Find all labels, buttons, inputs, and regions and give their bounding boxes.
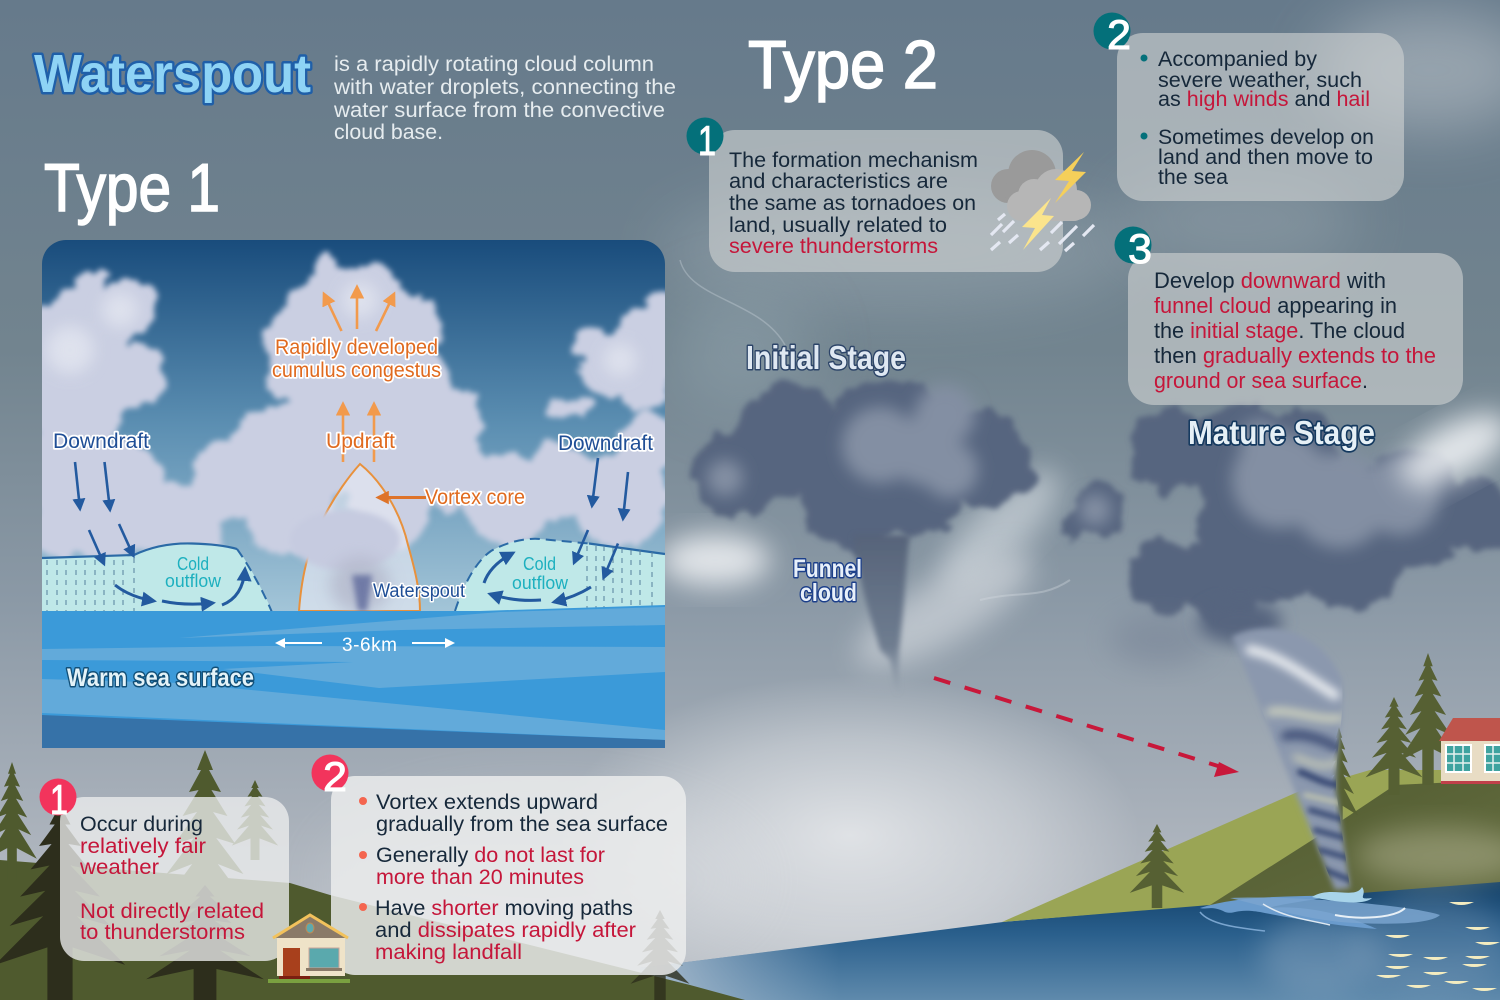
note text: land, usually related to [729,214,947,237]
panel: type 1 diagram [20,240,688,748]
background mist and wisps [320,10,1500,995]
badge 1 [686,117,724,164]
note text: the same as tornadoes on [729,192,976,215]
note text: severe weather, such [1158,69,1362,92]
note text: gradually from the sea surface [376,813,668,836]
icon: thunderstorm [991,150,1094,251]
arrow: width span [277,642,453,644]
label: cold outflow right: Cold [523,554,556,574]
water swirl [1200,887,1440,931]
panel: type 2 note 3 [1114,225,1463,405]
note text [1154,268,1436,393]
arrows: outflow circulation [115,553,591,605]
label: funnel cloud: cloud [800,579,857,607]
panel: type 1 note 1 [40,776,289,961]
cold outflow right [455,539,665,611]
note text: and characteristics are [729,170,948,193]
label: cold outflow left [166,556,221,587]
note text: relatively fair [80,835,206,858]
label: vortex core: Vortex core [425,486,525,509]
note text: Accompanied by [1158,48,1318,71]
label: downdraft right: Downdraft [558,432,653,455]
label: cold outflow right: outflow [512,573,569,593]
panel: lower scenery left [0,750,745,1000]
panel: type 1 note 2 [312,753,686,975]
label: rapidly developed cumulus congestus [272,336,441,382]
label: funnel cloud [793,555,862,607]
definition text [333,53,676,144]
badge 1 [40,776,76,823]
note text [375,791,668,964]
storm cloud: initial stage [693,379,1033,695]
note text: as high winds and hail [1158,88,1370,111]
note text: The formation mechanism [729,149,978,172]
badge 3: 3 [1128,225,1152,272]
note text: Develop downward with [1154,268,1386,293]
note text: weather [79,856,159,879]
note text [729,149,978,258]
panel: type 2 note 2 [1094,11,1404,201]
cold outflow left [42,543,274,617]
note text: Sometimes develop on [1158,126,1374,149]
clouds in diagram [20,256,688,560]
note text: to thunderstorms [80,921,245,944]
note text: Have shorter moving paths [375,897,633,920]
arrow: vortex core [378,496,426,499]
house right [1439,718,1500,784]
note text: then gradually extends to the [1154,343,1436,368]
arrows: updraft [324,287,394,462]
panel: type 2 note 1 [686,117,1094,272]
bullets [1140,54,1148,140]
note text: severe thunderstorms [729,235,938,258]
arrow: storm motion [934,678,1239,777]
badge 1: 1 [50,776,68,823]
heading: Type 1: Type 1 [44,150,220,226]
sea surface [42,605,665,748]
note text: the sea [1158,166,1228,189]
badge 1: 1 [698,117,716,164]
vortex dome [290,464,420,613]
label: mature stage: Mature Stage [1188,414,1375,451]
badge 3 [1114,225,1152,272]
note text: making landfall [375,941,522,964]
note text: Not directly related [80,900,264,923]
label: waterspout: Waterspout [373,581,466,602]
bullets [359,797,367,911]
definition text: is a rapidly rotating cloud column [334,53,654,76]
badge 2: 2 [1107,11,1131,58]
note text: Occur during [80,813,203,836]
label: downdraft left: Downdraft [53,430,149,453]
label: warm sea surface: Warm sea surface [67,664,254,692]
note text: land and then move to [1158,146,1373,169]
arrows: downdraft [75,458,628,578]
dark pine trees foreground [0,805,689,1000]
label: funnel cloud: Funnel [793,555,862,583]
panel: hillside right [1002,653,1500,922]
pine trees left [0,750,278,950]
label: cold outflow left: outflow [165,571,222,591]
label: cold outflow left: Cold [177,554,209,574]
note text: ground or sea surface. [1154,368,1368,393]
note text [79,813,264,944]
label: width 3-6km: 3-6km [342,635,397,656]
heading: Type 2: Type 2 [748,27,938,103]
note text: more than 20 minutes [376,866,584,889]
definition text: with water droplets, connecting the [333,76,676,99]
label: cold outflow right [512,556,568,589]
hill light [1002,770,1500,922]
label: initial stage: Initial Stage [746,339,906,376]
right wisp [1390,399,1500,501]
label: rapidly developed cumulus congestus: Rapidly developed [275,336,438,359]
note text: and dissipates rapidly after [375,919,636,942]
waterspout mature funnel [1232,628,1350,890]
badge 2: 2 [323,753,347,800]
funnel cloud initial [853,535,910,695]
storm cloud: mature stage [1057,399,1500,666]
hill left [0,860,745,1000]
note text: funnel cloud appearing in [1154,293,1397,318]
small waterspout in diagram [352,575,372,611]
title: Waterspout: Waterspout [34,44,311,104]
note text: Generally do not last for [376,844,605,867]
sun glints on water [1376,902,1500,991]
definition text: water surface from the convective [333,99,665,122]
icon: house left [268,915,350,983]
badge 2 [312,753,348,800]
panel: lake [640,880,1500,1000]
label: updraft: Updraft [326,430,395,453]
hill dark [1210,780,1500,905]
definition text: cloud base. [334,121,443,144]
note text: the initial stage. The cloud [1154,318,1405,343]
note text [1158,48,1374,189]
pine trees right [1130,653,1457,908]
note text: Vortex extends upward [376,791,598,814]
label: rapidly developed cumulus congestus: cumulus congestus [272,359,441,382]
badge 2 [1094,11,1131,58]
